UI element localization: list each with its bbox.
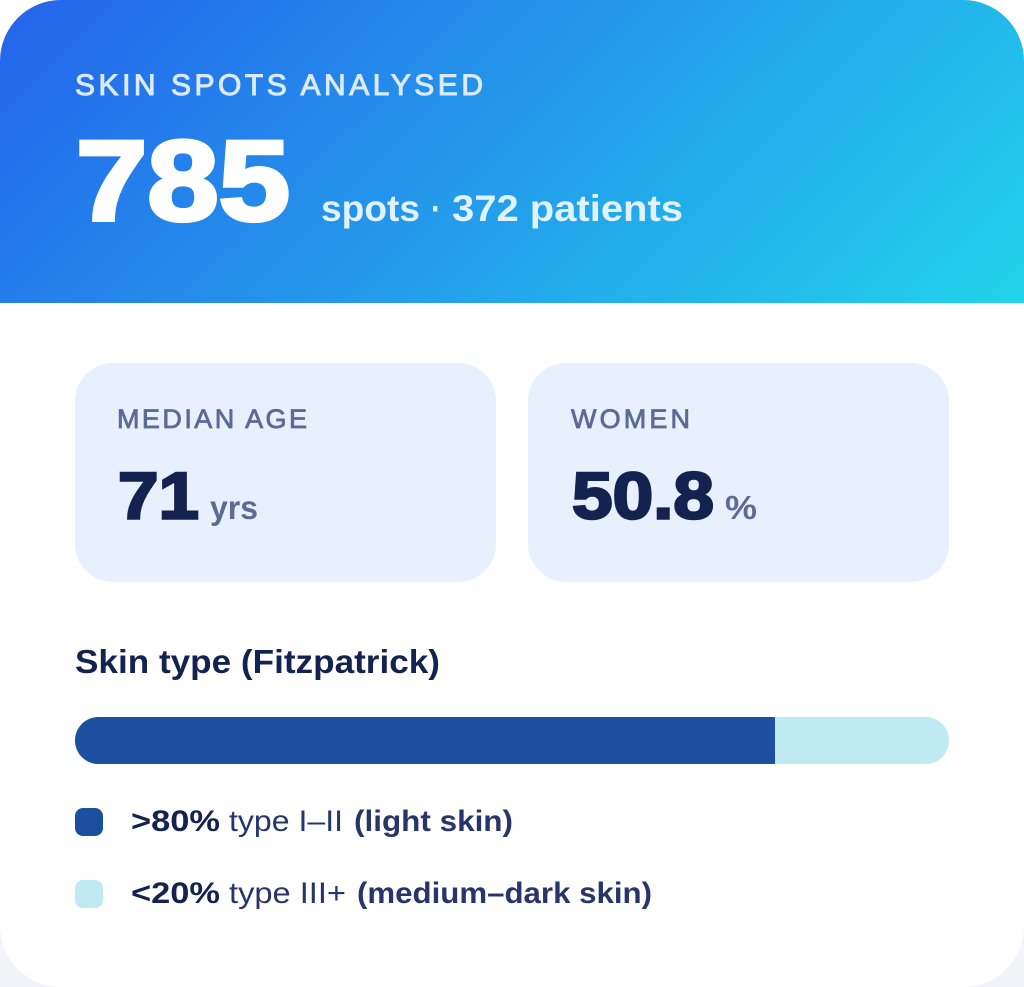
legend: type III+: (medium–dark skin)	[357, 877, 652, 910]
big number: 785 spots: 785	[76, 118, 290, 245]
legend: type I-II: (light skin)	[354, 805, 513, 838]
median age label: MEDIAN AGE	[117, 404, 307, 434]
header sub-label: spots	[321, 188, 420, 229]
women value: 50.8	[572, 458, 714, 532]
panel: median age	[75, 363, 496, 582]
header label: SKIN SPOTS ANALYSED	[75, 69, 483, 102]
women label: WOMEN	[571, 404, 690, 434]
stacked bar: skin type share	[75, 717, 949, 764]
header sub-label: ·	[431, 188, 441, 229]
median age value: 71	[118, 458, 199, 532]
legend: type I-II: type I–II	[229, 805, 343, 838]
median age unit: yrs	[210, 489, 258, 526]
header sub-label: 372 patients	[452, 188, 683, 229]
panel: women	[528, 363, 949, 582]
women unit: %	[725, 489, 757, 526]
heading: skin type: Skin type (Fitzpatrick)	[75, 643, 440, 680]
legend: type I-II: >80%	[131, 805, 220, 838]
legend: type III+: type III+	[229, 877, 346, 910]
legend: type III+: <20%	[131, 877, 220, 910]
legend: type III+	[75, 877, 652, 910]
panel: header banner	[0, 0, 1024, 303]
legend: type I-II	[75, 805, 513, 838]
